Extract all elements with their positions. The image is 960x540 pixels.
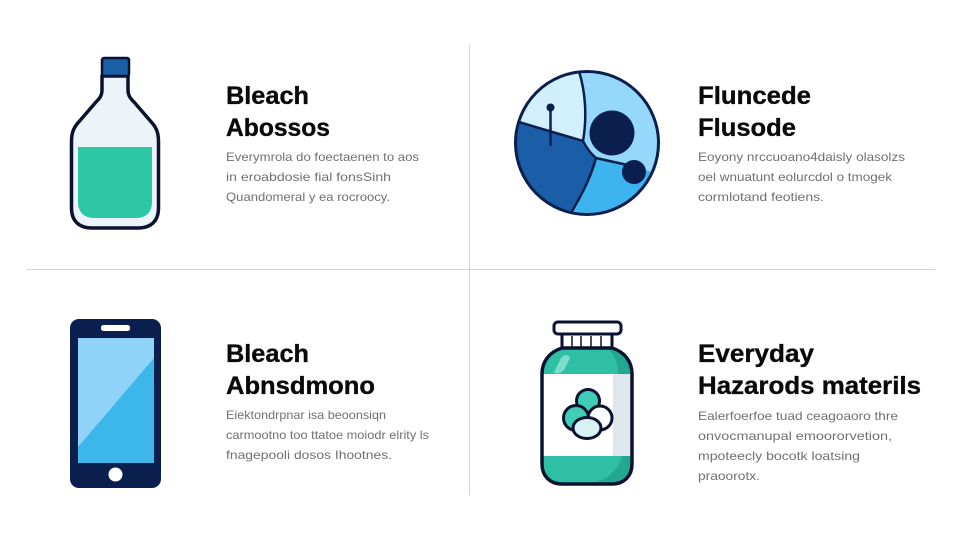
text block: fluoride description: oel wnuatunt eolurcdol o tmogek	[698, 170, 893, 184]
icon: medicine jar	[542, 322, 632, 484]
heading: bleach abnsdmono: Abnsdmono	[226, 372, 375, 400]
heading: bleach abossos: Bleach	[226, 82, 309, 110]
text block: bleach description: Everymrola do foectaenen to aos	[226, 150, 419, 164]
text block: materials description: mpoteecly bocotk loatsing	[698, 449, 860, 463]
text block: fluoride description: Eoyony nrccuoano4daisly olasolzs	[698, 150, 905, 164]
text block: materials description: praoorotx.	[698, 469, 760, 483]
text block: bleach description: Quandomeral y ea rocroocy.	[226, 190, 390, 204]
panel: bleach bottle	[72, 58, 419, 228]
heading: everyday hazarods materils: Everyday	[698, 340, 814, 368]
text block: materials description: Ealerfoerfoe tuad ceagoaoro thre	[698, 409, 898, 423]
panel: everyday hazardous materials	[542, 322, 921, 484]
heading: fluoride flusode: Fluncede	[698, 82, 811, 110]
text block: fluoride description: cormlotand feotiens.	[698, 190, 824, 204]
panel: phone	[70, 319, 429, 488]
icon: pill cluster	[564, 390, 612, 438]
heading: bleach abossos: Abossos	[226, 114, 330, 142]
icon: segmented circle	[514, 70, 660, 216]
text block: phone description: Eiektondrpnar isa beoonsiqn	[226, 408, 386, 422]
text block: phone description: fnagepooli dosos Ihootnes.	[226, 448, 392, 462]
text block: phone description: carmootno too ttatoe moiodr elrity ls	[226, 428, 429, 442]
text block: bleach description: in eroabdosie fial fonsSinh	[226, 170, 391, 184]
panel: fluoride flusode	[510, 66, 905, 225]
text block: materials description: onvocmanupal emoororvetion,	[698, 429, 892, 443]
icon: bottle	[72, 58, 158, 228]
heading: fluoride flusode: Flusode	[698, 114, 796, 142]
heading: everyday hazarods materils: Hazarods materils	[698, 372, 921, 400]
heading: bleach abnsdmono: Bleach	[226, 340, 309, 368]
icon: smartphone	[70, 319, 161, 488]
